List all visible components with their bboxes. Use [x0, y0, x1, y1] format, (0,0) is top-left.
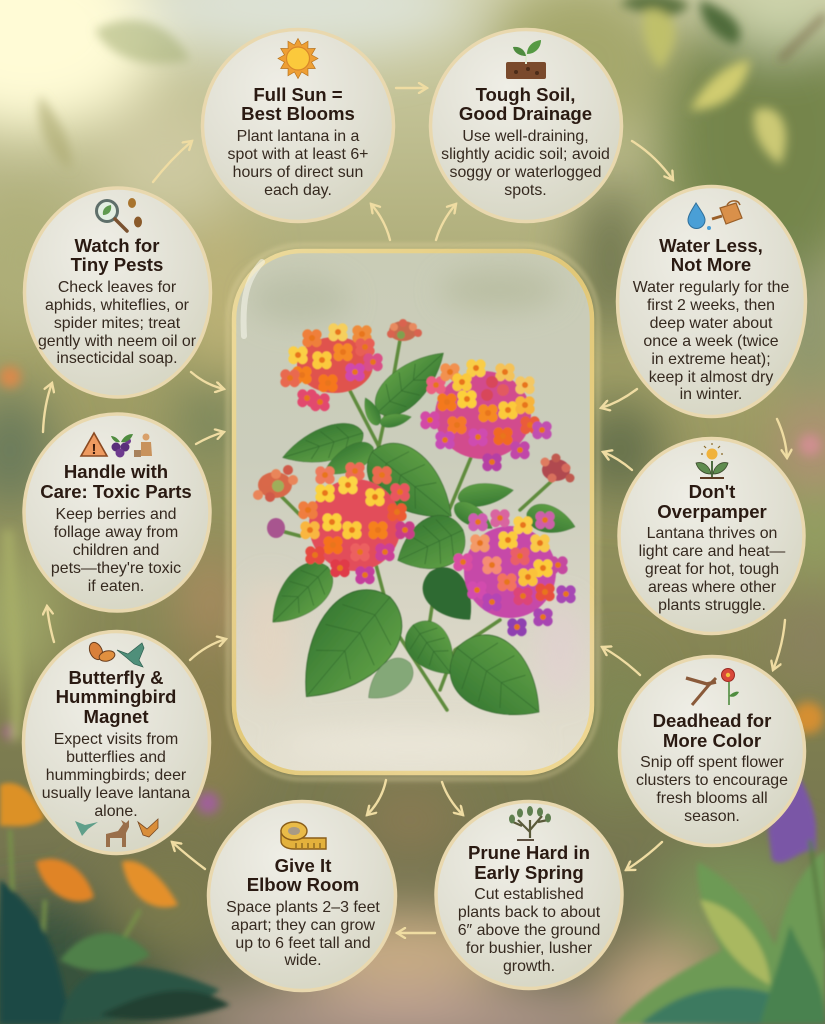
tip: Give It Elbow Room: Space plants 2–3 feet: [226, 899, 380, 916]
tip: Deadhead for More Color: clusters to encourage: [636, 772, 788, 789]
tip: Butterfly & Hummingbird Magnet: Hummingbird: [56, 686, 176, 707]
tip: Tough Soil, Good Drainage: [430, 30, 622, 222]
tip: Watch for Tiny Pests: Watch for: [74, 235, 160, 256]
lantana plant illustration: [253, 319, 579, 740]
tip: Deadhead for More Color: fresh blooms all: [656, 790, 768, 807]
tip: Watch for Tiny Pests: insecticidal soap.: [56, 350, 178, 367]
arrows: clockwise ring and toward center: [43, 88, 787, 933]
icon: sprout under sun: [696, 443, 728, 478]
tip: Full Sun = Best Blooms: Plant lantana in a: [237, 128, 360, 145]
tip: Watch for Tiny Pests: Check leaves for: [58, 279, 177, 296]
tip: Don't Overpamper: Overpamper: [657, 501, 767, 522]
tip: Tough Soil, Good Drainage: slightly acidic soil; avoid: [441, 146, 610, 163]
tip: Water Less, Not More: Water regularly for the: [633, 279, 789, 296]
tip: Butterfly & Hummingbird Magnet: hummingbirds; deer: [46, 767, 187, 784]
tip: Watch for Tiny Pests: gently with neem oil or: [38, 333, 197, 350]
tip: Water Less, Not More: Not More: [671, 254, 751, 275]
flower cluster: right: [420, 359, 552, 471]
tip: Don't Overpamper: plants struggle.: [658, 597, 766, 614]
tip: Prune Hard in Early Spring: plants back to about: [458, 904, 601, 921]
tip: Don't Overpamper: [619, 438, 804, 634]
tip: Butterfly & Hummingbird Magnet: Butterfly &: [68, 667, 164, 688]
tip: Deadhead for More Color: More Color: [663, 730, 761, 751]
tip: Prune Hard in Early Spring: 6″ above the ground: [458, 922, 600, 939]
flower cluster: lower right: [453, 509, 576, 636]
tip: Deadhead for More Color: Deadhead for: [653, 710, 771, 731]
tip: Give It Elbow Room: [208, 802, 396, 990]
tip: Full Sun = Best Blooms: [202, 30, 394, 222]
icon: warning, berries, child and pet: !: [92, 441, 96, 458]
stems: [270, 340, 555, 710]
tip: Deadhead for More Color: [620, 656, 804, 846]
tip: Prune Hard in Early Spring: for bushier, lusher: [466, 940, 593, 957]
tip: Deadhead for More Color: Snip off spent flower: [640, 754, 785, 771]
icon: seedling in soil: [506, 40, 546, 79]
tip: Give It Elbow Room: up to 6 feet tall and: [235, 935, 371, 952]
tip: Tough Soil, Good Drainage: soggy or waterlogged: [450, 164, 601, 181]
tip: Watch for Tiny Pests: Tiny Pests: [71, 254, 163, 275]
icon: warning, berries, child and pet: [81, 433, 152, 458]
tip: Full Sun = Best Blooms: spot with at least 6+: [228, 146, 368, 163]
tip: Don't Overpamper: Lantana thrives on: [647, 525, 777, 542]
tip: Watch for Tiny Pests: aphids, whiteflies, or: [45, 297, 190, 314]
tip: Butterfly & Hummingbird Magnet: alone.: [94, 803, 138, 820]
tip: Water Less, Not More: once a week (twice: [643, 333, 779, 350]
tip: Prune Hard in Early Spring: Early Spring: [474, 862, 584, 883]
tip: Don't Overpamper: light care and heat—: [639, 543, 785, 560]
tip: Water Less, Not More: deep water about: [650, 315, 773, 332]
tip: Prune Hard in Early Spring: [436, 802, 622, 988]
tip: Handle with Care: Toxic Parts: Handle with: [64, 461, 168, 482]
tip: Water Less, Not More: keep it almost dry: [649, 369, 773, 386]
tip: Prune Hard in Early Spring: Prune Hard in: [468, 842, 590, 863]
icon: pruning shears and flower: [686, 668, 739, 705]
flower cluster: top left: [280, 323, 383, 411]
tip: Handle with Care: Toxic Parts: Care: Toxic Parts: [40, 481, 192, 502]
tip: Don't Overpamper: great for hot, tough: [645, 561, 779, 578]
icon: water drop and watering can: [688, 201, 742, 230]
tip: Tough Soil, Good Drainage: spots.: [504, 182, 547, 199]
tip: Butterfly & Hummingbird Magnet: [24, 632, 210, 854]
tip: Handle with Care: Toxic Parts: children and: [73, 542, 159, 559]
icon: measuring tape: [281, 822, 326, 849]
tip: Give It Elbow Room: Elbow Room: [247, 874, 359, 895]
tip: Water Less, Not More: in extreme heat);: [651, 351, 771, 368]
tip: Tough Soil, Good Drainage: Good Drainage: [459, 103, 592, 124]
tip: Tough Soil, Good Drainage: Tough Soil,: [476, 84, 575, 105]
leaves: [258, 339, 579, 740]
tip: Prune Hard in Early Spring: Cut established: [474, 886, 584, 903]
tip: Handle with Care: Toxic Parts: if eaten.: [88, 578, 144, 595]
tip: Don't Overpamper: areas where other: [648, 579, 777, 596]
flower cluster: lower left: [298, 462, 415, 584]
tip: Butterfly & Hummingbird Magnet: usually leave lantana: [42, 785, 190, 802]
tip: Give It Elbow Room: Give It: [275, 855, 331, 876]
tip: Handle with Care: Toxic Parts: Keep berries and: [55, 506, 177, 523]
tip: Water Less, Not More: first 2 weeks, then: [647, 297, 775, 314]
tip: Water Less, Not More: in winter.: [680, 386, 742, 403]
icon: hummingbird, deer, butterfly: [75, 819, 158, 847]
tip: Full Sun = Best Blooms: Full Sun =: [253, 84, 343, 105]
tip: Handle with Care: Toxic Parts: pets—they're toxic: [51, 560, 181, 577]
tip: Butterfly & Hummingbird Magnet: Expect visits from: [54, 731, 178, 748]
tip: Prune Hard in Early Spring: growth.: [503, 958, 555, 975]
tip: Give It Elbow Room: apart; they can grow: [231, 917, 376, 934]
tip: Butterfly & Hummingbird Magnet: butterflies and: [66, 749, 166, 766]
flower buds: left and right: [253, 454, 574, 538]
icon: pruned shrub: [509, 806, 551, 840]
tip: Deadhead for More Color: season.: [684, 808, 740, 825]
tip: Butterfly & Hummingbird Magnet: Magnet: [83, 706, 149, 727]
central panel: [228, 245, 598, 779]
tip: Water Less, Not More: Water Less,: [659, 235, 763, 256]
tip: Handle with Care: Toxic Parts: [24, 414, 210, 611]
tip: Water Less, Not More: [618, 186, 806, 416]
tip: Full Sun = Best Blooms: Best Blooms: [241, 103, 355, 124]
icon: magnifier and bugs: [96, 198, 142, 231]
tip: Handle with Care: Toxic Parts: follage away from: [54, 524, 178, 541]
tip: Full Sun = Best Blooms: hours of direct sun: [233, 164, 363, 181]
tip: Don't Overpamper: Don't: [689, 481, 735, 502]
tip: Full Sun = Best Blooms: each day.: [264, 182, 332, 199]
tip: Watch for Tiny Pests: [24, 188, 210, 397]
icon: butterfly and hummingbird: [87, 640, 144, 667]
tip: Watch for Tiny Pests: spider mites; treat: [54, 315, 181, 332]
tip: Tough Soil, Good Drainage: Use well-draining,: [462, 128, 589, 145]
icon: sun: [278, 38, 318, 78]
tip: Give It Elbow Room: wide.: [283, 952, 322, 969]
flower bud: top: [387, 319, 422, 341]
